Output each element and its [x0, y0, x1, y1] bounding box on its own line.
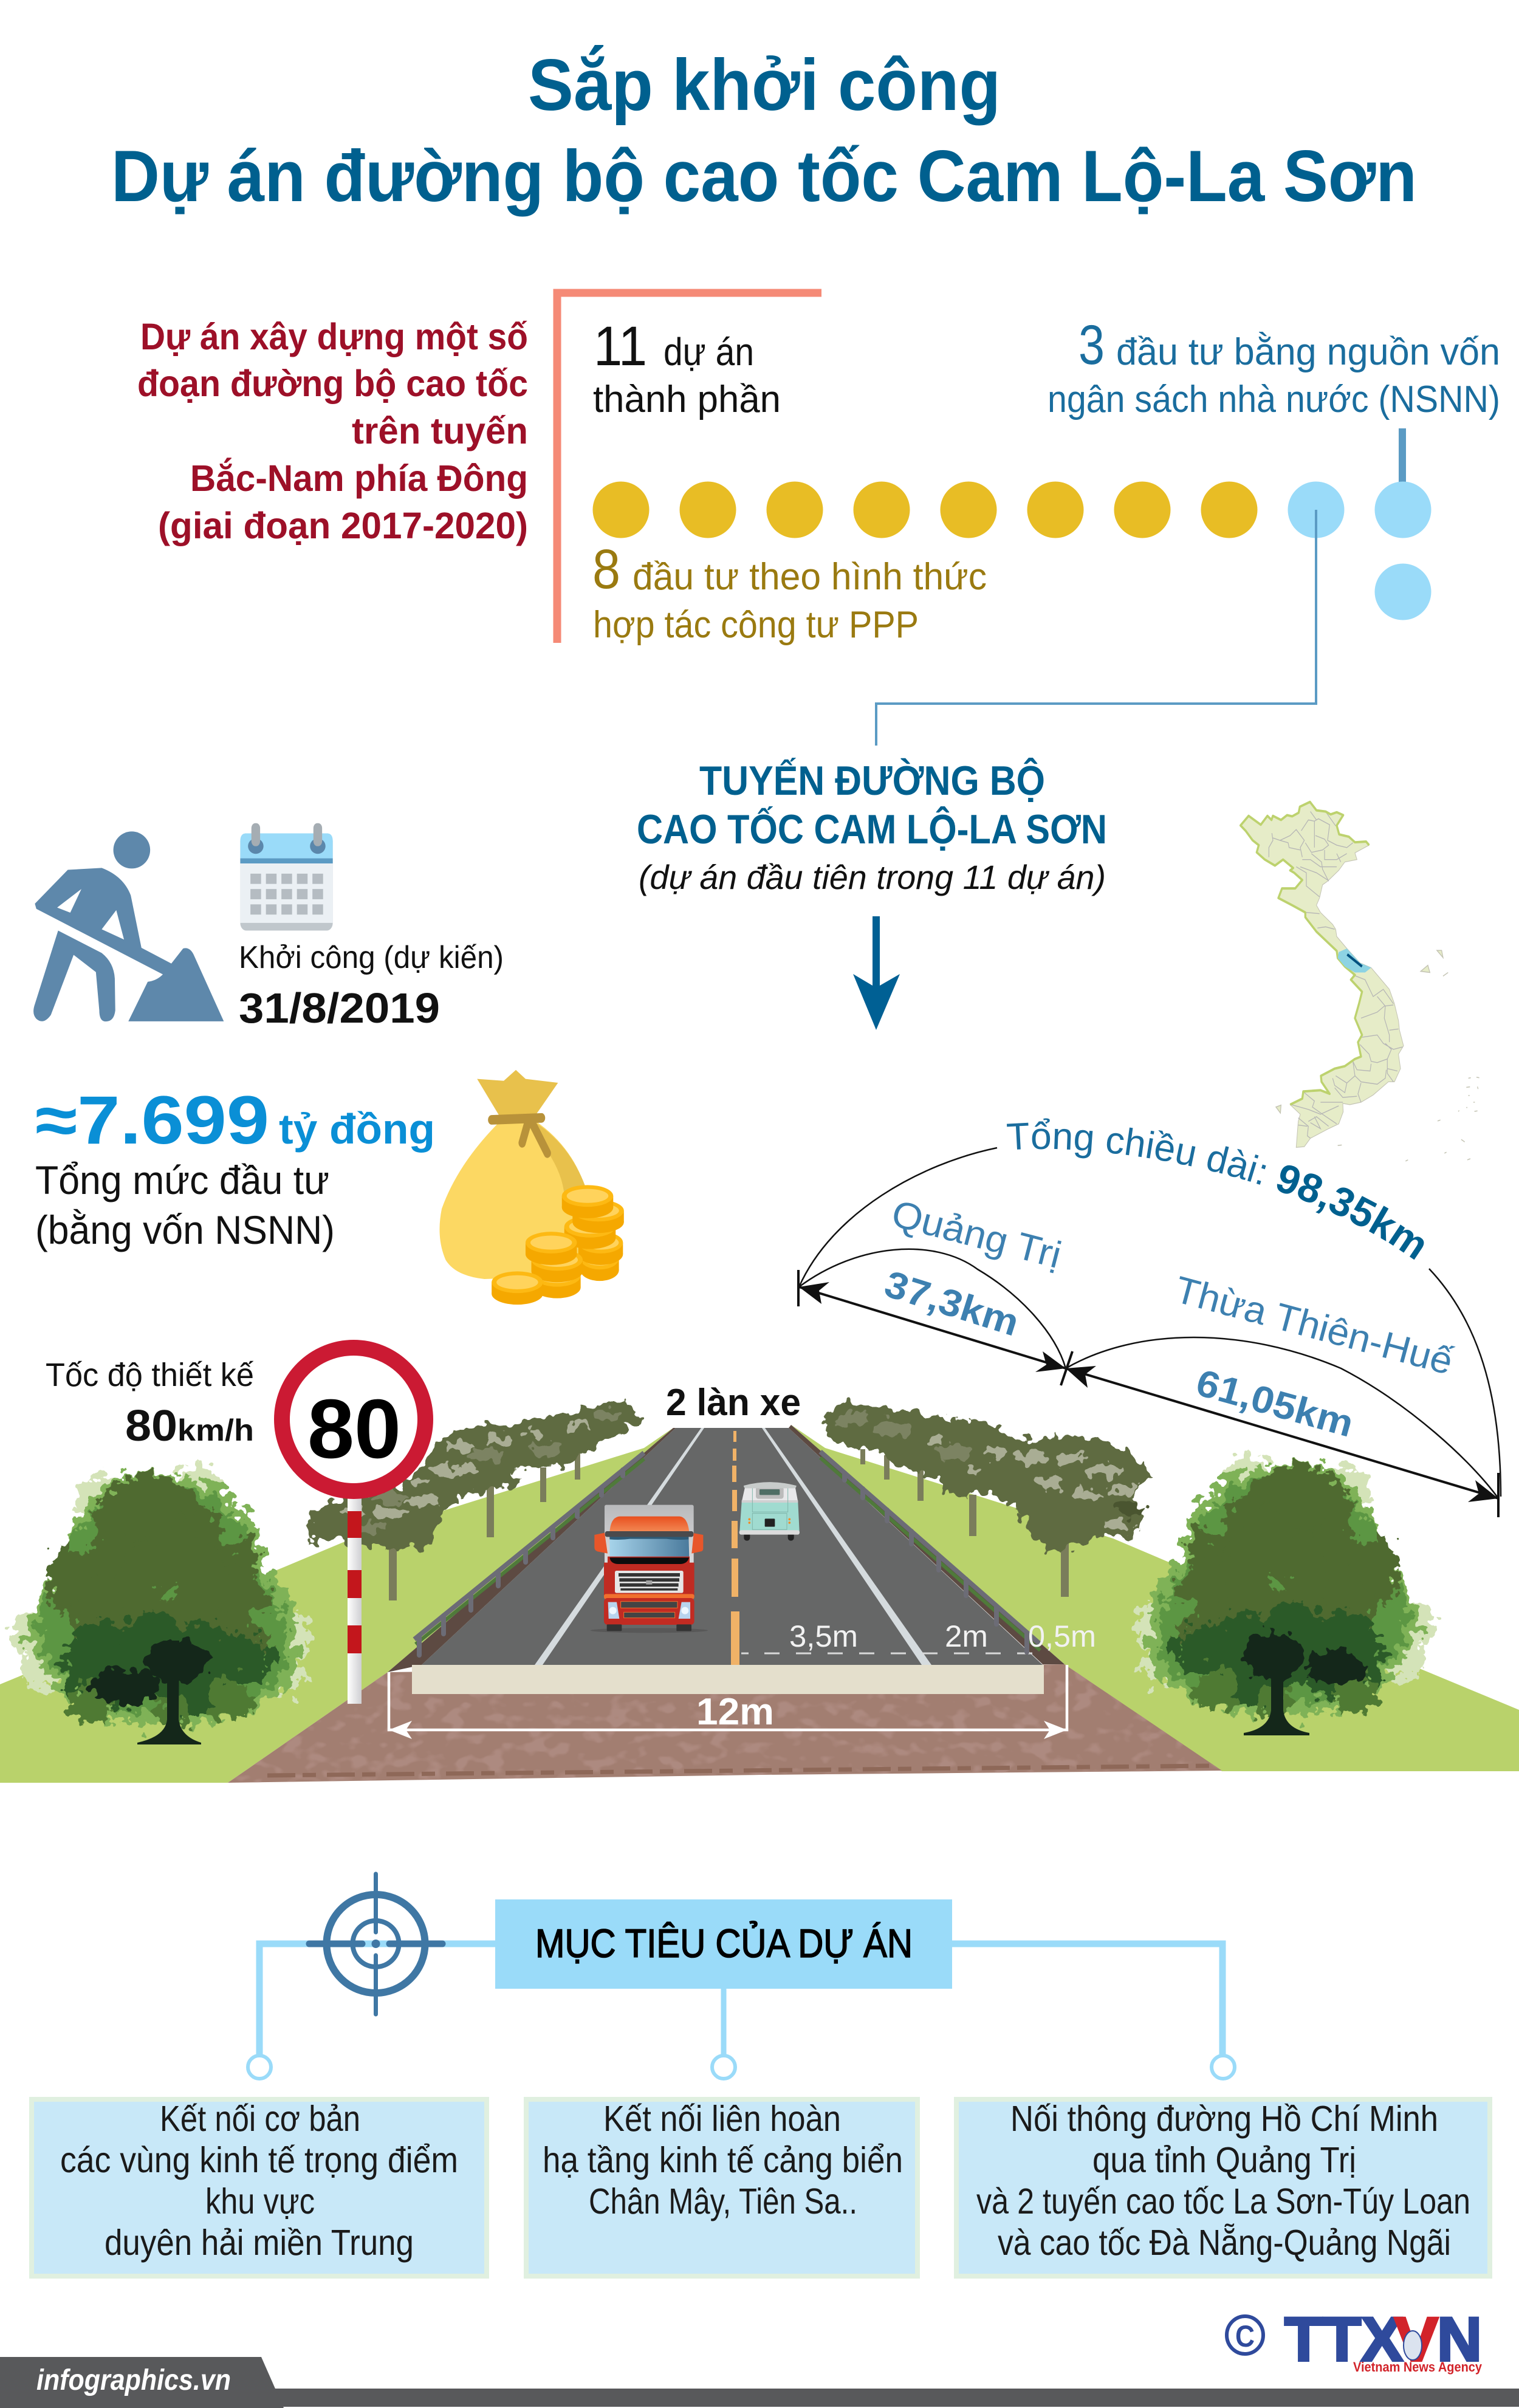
logo: TTXVN: TTX: [1284, 2305, 1403, 2374]
panel: objective 3: và cao tốc Đà Nẵng-Quảng Ngãi: [998, 2223, 1451, 2263]
panel: objective 2: hạ tầng kinh tế cảng biển: [543, 2140, 903, 2180]
panel: objective 1: khu vực: [205, 2181, 315, 2221]
total investment figure: (bằng vốn NSNN): [35, 1207, 335, 1252]
objectives heading: [495, 1899, 952, 1989]
total investment figure: ≈7.699: [35, 1082, 269, 1158]
icon: big tree left: [12, 1462, 310, 1744]
speed limit pole: [348, 1498, 362, 1704]
title: [111, 44, 1417, 217]
start date: 31/8/2019: [239, 984, 440, 1032]
design speed text: 80: [125, 1402, 177, 1450]
van: [739, 1482, 800, 1541]
intro text: Bắc-Nam phía Đông: [190, 458, 528, 499]
title: Sắp khởi công: [528, 44, 1001, 126]
text: 11 component projects: [593, 315, 781, 420]
text: 11 component projects: dự án: [663, 330, 754, 374]
intro text: trên tuyến: [352, 410, 528, 451]
icon: worker with shovel: [33, 831, 224, 1021]
Thua Thien-Hue segment: 61,05km: [1192, 1362, 1358, 1446]
text: 8 PPP projects: đầu tư theo hình thức: [633, 556, 987, 598]
earth streaks: [267, 1766, 1209, 1775]
Quang Tri segment: 37,3km: [880, 1263, 1024, 1345]
right grass: [791, 1425, 1519, 1771]
text: 8 PPP projects: 8: [592, 538, 620, 600]
panel: objective 1: Kết nối cơ bản: [160, 2099, 360, 2139]
icon: big tree right: [1136, 1452, 1434, 1735]
start date: [239, 940, 504, 1032]
panel: objective 1: [32, 2099, 487, 2276]
panel: objective 2: Kết nối liên hoàn: [603, 2099, 841, 2139]
Quang Tri segment: [799, 1193, 1066, 1368]
icon: calendar: [240, 823, 333, 931]
total investment figure: [35, 1082, 435, 1252]
panel: objective 3: qua tỉnh Quảng Trị: [1092, 2140, 1356, 2180]
text: 11 component projects: 11: [594, 315, 647, 377]
Quang Tri segment: Quảng Trị: [887, 1193, 1066, 1277]
logo: TTXVN: N: [1437, 2305, 1482, 2374]
left guardrail: [414, 1453, 644, 1655]
lane width labels: [789, 1619, 1096, 1653]
beige road base: [412, 1665, 1044, 1694]
road edges: [388, 1425, 1065, 1672]
route heading: (dự án đầu tiên trong 11 dự án): [639, 858, 1106, 896]
icon: target: [309, 1874, 442, 2014]
design speed text: Tốc độ thiết kế: [46, 1357, 254, 1393]
arrow down: [853, 916, 900, 1030]
coral frame: [557, 293, 821, 643]
lane count label: 2 làn xe: [666, 1382, 801, 1424]
route heading: [637, 757, 1107, 896]
logo: TTXVN: [1227, 2305, 1483, 2375]
text: 3 state budget projects: 3: [1078, 314, 1105, 376]
earth embankment: [228, 1664, 1222, 1783]
design speed text: [46, 1357, 254, 1450]
lane width labels: 2m: [945, 1619, 988, 1653]
intro text: Dự án xây dựng một số: [140, 316, 528, 357]
panel: objective 2: [526, 2099, 917, 2276]
panel: objective 1: duyên hải miền Trung: [105, 2223, 414, 2263]
truck: [591, 1505, 708, 1633]
Thua Thien-Hue segment: Thừa Thiên-Huế: [1170, 1269, 1457, 1383]
objectives heading: MỤC TIÊU CỦA DỰ ÁN: [535, 1921, 913, 1966]
intro text: [137, 316, 528, 546]
panel: objective 3: Nối thông đường Hồ Chí Minh: [1010, 2099, 1438, 2139]
Thua Thien-Hue segment: [1066, 1269, 1498, 1498]
lane lines: [535, 1428, 931, 1665]
lane width labels: 3,5m: [789, 1619, 858, 1653]
panel: objective 3: [956, 2099, 1490, 2276]
speed limit sign: [282, 1348, 425, 1491]
lane width dashes: [741, 1653, 1046, 1654]
connector to the route title: [876, 510, 1316, 746]
road width dimension 12m: [389, 1665, 1067, 1739]
roadside trees left: [310, 1401, 639, 1600]
left grass: [0, 1428, 673, 1783]
road width dimension 12m: 12m: [696, 1691, 774, 1733]
asphalt: [422, 1428, 1043, 1665]
speed limit sign: 80: [307, 1382, 401, 1476]
text: 8 PPP projects: [592, 538, 987, 646]
total length arc: [799, 1148, 1501, 1497]
distance arrows: [798, 1270, 1498, 1517]
total investment figure: tỷ đồng: [279, 1105, 435, 1153]
logo: TTXVN: Vietnam News Agency: [1353, 2359, 1483, 2375]
connector lines: objectives: [248, 1944, 1235, 2079]
intro text: đoạn đường bộ cao tốc: [137, 363, 528, 404]
route heading: TUYẾN ĐƯỜNG BỘ: [699, 757, 1045, 804]
start date: Khởi công (dự kiến): [239, 940, 504, 975]
panel: objective 2: Chân Mây, Tiên Sa..: [589, 2181, 857, 2221]
right guardrail: [820, 1452, 1040, 1652]
title: Dự án đường bộ cao tốc Cam Lộ-La Sơn: [111, 135, 1417, 217]
design speed text: km/h: [177, 1413, 254, 1447]
panel: objective 1: các vùng kinh tế trọng điểm: [60, 2140, 458, 2180]
total length text on curve: Tổng chiều dài: 98,35km: [1007, 1118, 1424, 1260]
route heading: CAO TỐC CAM LỘ-LA SƠN: [637, 806, 1107, 852]
text: 11 component projects: thành phần: [593, 379, 781, 420]
text: 3 state budget projects: đầu tư bằng nguồn vốn: [1116, 331, 1500, 373]
roadside trees right: [823, 1399, 1154, 1597]
total investment figure: Tổng mức đầu tư: [35, 1158, 329, 1202]
footer bar: infographics.vn: [36, 2364, 231, 2396]
dots: 8 PPP projects and 3 state budget projects: [593, 481, 1432, 620]
text: 8 PPP projects: hợp tác công tư PPP: [593, 604, 919, 646]
icon: money bag and coins: [439, 1070, 624, 1305]
lane width labels: 0,5m: [1028, 1619, 1096, 1653]
connector from text to blue dot: [1399, 428, 1406, 483]
footer bar: [0, 2357, 1519, 2408]
logo: TTXVN: C: [1235, 2319, 1255, 2353]
map of Vietnam: [1241, 802, 1480, 1161]
centre dashes: [731, 1431, 739, 1665]
road scene: [0, 1425, 1519, 1783]
logo: TTXVN: V: [1394, 2305, 1438, 2374]
text: 3 state budget projects: [1048, 314, 1500, 420]
intro text: (giai đoạn 2017-2020): [158, 505, 528, 546]
